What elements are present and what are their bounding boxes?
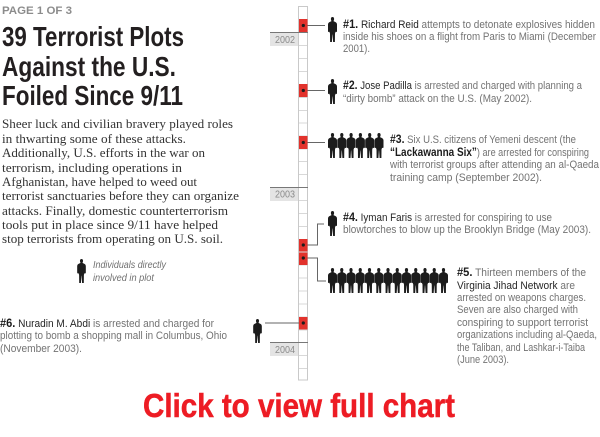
- title: 39 Terrorist Plots: [2, 21, 184, 52]
- legend: individuals directly involved in plot: Individuals directly: [93, 259, 167, 271]
- plot #5: conspiring to support terrorist: [457, 317, 588, 329]
- year marker 2002: 2002: [275, 34, 295, 46]
- title: Foiled Since 9/11: [2, 80, 183, 111]
- year marker 2004: 2004: [275, 344, 295, 356]
- plot #4: [299, 210, 591, 252]
- year marker 2002: [270, 32, 308, 46]
- intro paragraph: in thwarting some of these attacks.: [2, 131, 186, 146]
- page indicator: PAGE 1 OF 3: [2, 5, 72, 17]
- title: [2, 21, 184, 111]
- year marker 2003: 2003: [275, 188, 295, 200]
- year marker 2004: [270, 342, 308, 356]
- icons: six individuals: [328, 133, 384, 158]
- plot #1: 2001).: [343, 43, 370, 55]
- icons: thirteen individuals: [328, 268, 448, 293]
- plot #5: #5. Thirteen members of the: [457, 265, 586, 279]
- plot #3: training camp (September 2002).: [390, 172, 542, 184]
- intro paragraph: Additionally, U.S. efforts in the war on: [2, 145, 205, 160]
- plot #6: plotting to bomb a shopping mall in Columbus, Ohio: [0, 330, 227, 342]
- legend: individuals directly involved in plot: involved in plot: [93, 272, 155, 284]
- plot #6: [0, 316, 308, 355]
- plot #6: #6. Nuradin M. Abdi is arrested and charged for: [0, 316, 214, 330]
- title: Against the U.S.: [2, 51, 176, 82]
- plot #5: (June 2003).: [457, 354, 509, 366]
- plot #2: #2. Jose Padilla is arrested and charged with planning a: [343, 78, 583, 92]
- intro paragraph: stop terrorists from operating on U.S. soil.: [2, 231, 223, 246]
- plot #5: [299, 252, 597, 366]
- intro paragraph: tools put in place since 9/11 have helped: [2, 217, 219, 232]
- call to action: Click to view full chart: [143, 388, 455, 425]
- intro paragraph: attacks. Finally, domestic counterterrorism: [2, 203, 228, 218]
- plot #2: “dirty bomb” attack on the U.S. (May 2002).: [343, 93, 532, 105]
- intro paragraph: terrorist sanctuaries before they can organize: [2, 188, 239, 203]
- plot #3: [299, 132, 600, 184]
- timeline: [270, 6, 308, 380]
- intro paragraph: Sheer luck and civilian bravery played roles: [2, 116, 233, 131]
- plot #4: #4. Iyman Faris is arrested for conspiring to use: [343, 210, 552, 224]
- plot #5: Virginia Jihad Network are: [457, 280, 575, 292]
- intro paragraph: terrorism, including operations in: [2, 160, 183, 175]
- year marker 2003: [270, 188, 308, 201]
- plot #5: Seven are also charged with: [457, 304, 578, 316]
- plot #2: [299, 78, 583, 105]
- plot #3: #3. Six U.S. citizens of Yemeni descent (the: [390, 132, 576, 146]
- legend: individuals directly involved in plot: [77, 259, 167, 284]
- intro paragraph: [2, 116, 239, 246]
- intro paragraph: Afghanistan, have helped to weed out: [2, 174, 197, 189]
- plot #1: [299, 17, 596, 55]
- plot #6: (November 2003).: [0, 343, 82, 355]
